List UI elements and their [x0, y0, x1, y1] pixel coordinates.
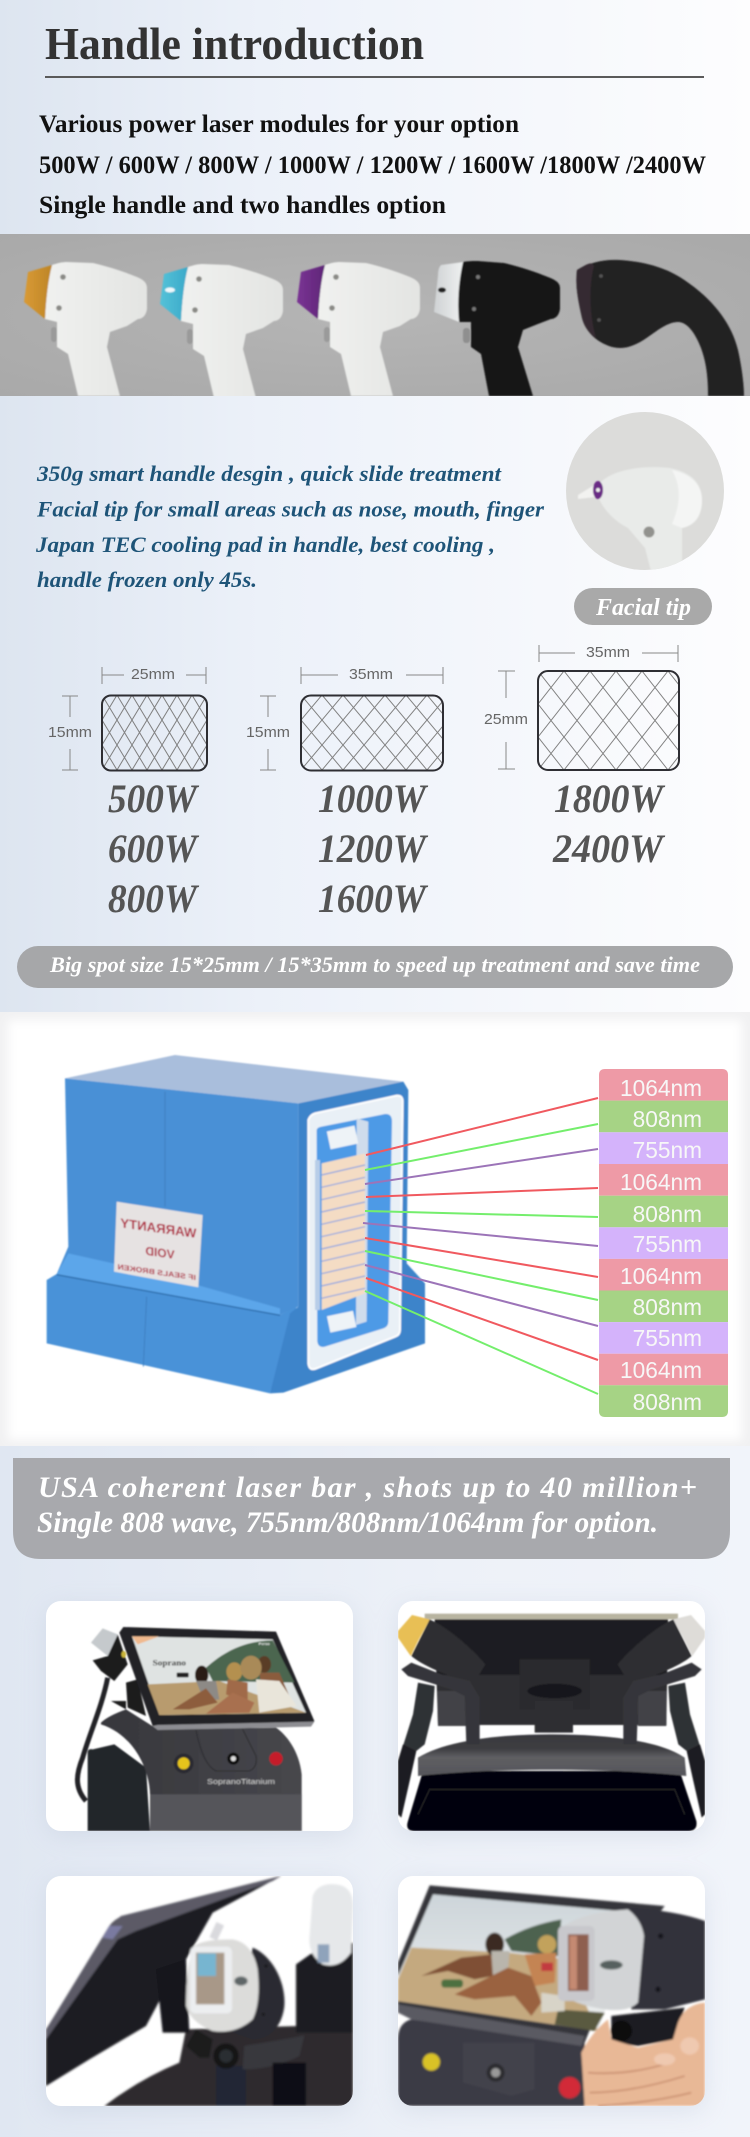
- text block: laser module options: 500W / 600W / 800W / 1000W / 1200W / 1600W /1800W /2400W: [39, 150, 706, 179]
- panel: machine front photo: Perso: [259, 1641, 270, 1646]
- left handle: [398, 1615, 485, 1818]
- text block: handle features: [35, 461, 544, 592]
- icon: purple tip handle: [297, 262, 420, 396]
- power list column two: 1000W: [318, 776, 428, 821]
- legend: wavelengths: 808nm: [633, 1294, 702, 1320]
- panel: hand holding handle photo: [398, 1876, 705, 2106]
- diagram: 15x35mm spot: 35mm: [349, 666, 393, 683]
- machine grill: [88, 1744, 150, 1831]
- holder post: [296, 1943, 353, 2033]
- icon: black handle with silver tip: [434, 261, 560, 396]
- diagram: 15x35mm spot: [246, 666, 443, 770]
- legend: wavelengths: 1064nm: [620, 1357, 702, 1383]
- callout: facial tip: Facial tip: [595, 595, 691, 621]
- black rear: [630, 1909, 705, 2012]
- diagram: 15x25mm spot: 15mm: [48, 724, 92, 741]
- diagram: 15x35mm spot: 15mm: [246, 724, 290, 741]
- power list column two: 1200W: [318, 826, 428, 871]
- text block: handle features: Japan TEC cooling pad in handle, best cooling ,: [35, 532, 495, 557]
- legend: wavelengths: [599, 1069, 728, 1417]
- icon: black curved handle: [576, 260, 744, 396]
- lower cabinet: [407, 1771, 697, 1831]
- legend: wavelengths: 808nm: [633, 1389, 702, 1415]
- callout: big spot size: Big spot size 15*25mm / 15*35mm to speed up treatment and save time: [49, 952, 700, 977]
- icon: facial tip handle photo: [566, 412, 724, 575]
- legend: wavelengths: 1064nm: [620, 1169, 702, 1195]
- legend: wavelengths: 1064nm: [620, 1263, 702, 1289]
- legend: wavelengths: 808nm: [633, 1201, 702, 1227]
- machine body: [398, 2019, 585, 2106]
- text block: laser module options: Various power laser modules for your option: [39, 109, 519, 138]
- base: [104, 2026, 353, 2106]
- right handle: [618, 1615, 705, 1818]
- text block: handle features: 350g smart handle desgin , quick slide treatment: [36, 461, 502, 486]
- text block: laser module options: [39, 109, 706, 219]
- white handle: [309, 1884, 353, 1965]
- grip: [186, 2029, 213, 2058]
- sticker: warranty void: IF SEALS BROKEN: [117, 1262, 196, 1282]
- hand: [581, 2003, 705, 2106]
- power list column one: 800W: [108, 876, 199, 921]
- handle and cable: [77, 1678, 108, 1801]
- screen picture: [398, 1892, 614, 2028]
- panel: machine front photo: [46, 1601, 353, 1831]
- touch screen: [119, 1627, 314, 1729]
- icon: gold tip handle: [24, 262, 147, 396]
- callout: big spot size: [17, 946, 733, 988]
- legend: wavelengths: 808nm: [633, 1106, 702, 1132]
- panel: handle holder photo: [46, 1876, 353, 2106]
- screen back: [425, 1614, 678, 1619]
- callout: facial tip: [574, 588, 712, 625]
- diagram: 25x35mm spot: [484, 644, 679, 770]
- legend: wavelengths: 1064nm: [620, 1075, 702, 1101]
- machine body: [101, 1709, 302, 1831]
- panel: laser module wavelengths: [0, 1012, 750, 1446]
- legend: wavelengths: 755nm: [633, 1325, 702, 1351]
- power list column three: 2400W: [552, 826, 665, 871]
- text block: laser module options: Single handle and two handles option: [39, 190, 446, 219]
- power list column one: 600W: [108, 826, 199, 871]
- power list column three: [552, 776, 665, 871]
- title: Handle introduction: [45, 18, 424, 69]
- panel: two handles rear photo: [398, 1601, 705, 1831]
- power list column two: [318, 776, 428, 921]
- diagram: 15x25mm spot: [48, 666, 207, 770]
- legend: wavelengths: 755nm: [633, 1231, 702, 1257]
- title underline: [45, 76, 704, 78]
- silver head: [186, 1939, 259, 2032]
- panel: machine front photo: Soprano: [153, 1659, 186, 1668]
- sticker: warranty void: WARRANTY: [120, 1215, 196, 1241]
- screen stand: [111, 1679, 146, 1716]
- text block: handle features: Facial tip for small areas such as nose, mouth, finger: [36, 496, 544, 522]
- diagram: 25x35mm spot: 35mm: [586, 644, 630, 661]
- power list column two: 1600W: [318, 876, 428, 921]
- base shelf: [418, 1734, 686, 1776]
- callout: coherent laser bar: [13, 1458, 730, 1559]
- sticker: warranty void: VOID: [145, 1244, 175, 1262]
- power list column one: 500W: [108, 776, 199, 821]
- diagram: 15x25mm spot: 25mm: [131, 666, 175, 683]
- legend: wavelengths: 755nm: [633, 1137, 702, 1163]
- icon: blue laser module: [47, 1055, 425, 1393]
- card shadows: [46, 1606, 705, 2111]
- callout: coherent laser bar: USA coherent laser bar , shots up to 40 million+: [38, 1471, 697, 1504]
- panel: handle photo band: [0, 234, 750, 398]
- panel: machine front photo: SopranoTitanium: [207, 1777, 275, 1786]
- icon: teal tip handle: [160, 264, 283, 398]
- sticker: warranty void: [114, 1202, 203, 1287]
- diagram: 25x35mm spot: 25mm: [484, 711, 528, 728]
- stand: [156, 1959, 189, 2033]
- power list column one: [108, 776, 199, 921]
- silver head: [574, 1908, 646, 2011]
- screen mount: [520, 1660, 590, 1674]
- screen frame: [398, 1885, 665, 2043]
- grip: [611, 2008, 685, 2046]
- laser window: [308, 1096, 403, 1369]
- leader lines: [363, 1098, 598, 1394]
- callout: coherent laser bar: Single 808 wave, 755nm/808nm/1064nm for option.: [37, 1506, 658, 1539]
- text block: handle features: handle frozen only 45s.: [37, 567, 257, 592]
- power list column three: 1800W: [554, 776, 665, 821]
- screen back: [46, 1876, 281, 2086]
- black rear: [240, 1946, 286, 2030]
